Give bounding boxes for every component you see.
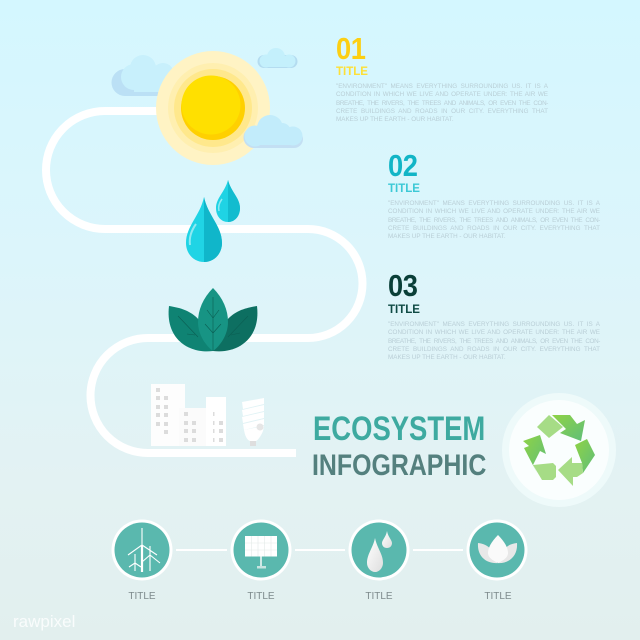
body text 03: "ENVIRONMENT" MEANS EVERYTHING SURROUNDING US. IT IS A: [388, 321, 600, 328]
number 01: 01: [336, 31, 365, 66]
block 02: [388, 148, 600, 240]
heading: infographic: INFOGRAPHIC: [312, 449, 486, 482]
label: title 2: TITLE: [247, 591, 275, 602]
block 03: [388, 268, 600, 361]
body text 02: BREATHE, THE RIVERS, THE TREES AND ANIMALS, OR EVEN THE CON-: [388, 217, 600, 224]
body text 01: BREATHE, THE RIVERS, THE TREES AND ANIMALS, OR EVEN THE CON-: [336, 100, 548, 107]
watermark: rawpixel: [13, 612, 75, 631]
label: title 3: TITLE: [365, 591, 393, 602]
body text 01: CONDITION IN WHICH WE LIVE AND OPERATE UNDER: THE AIR WE: [336, 91, 548, 98]
title 03: TITLE: [388, 302, 420, 316]
block 01: [336, 31, 548, 123]
number 03: 03: [388, 268, 417, 303]
icon: large water drop: [186, 197, 222, 262]
icon: solar panel badge: [230, 520, 292, 580]
icon: small water drop: [216, 180, 240, 222]
body text 02: MAKES UP THE EARTH - OUR HABITAT.: [388, 233, 506, 240]
icon: recycle badge: [502, 393, 616, 507]
body text 03: MAKES UP THE EARTH - OUR HABITAT.: [388, 354, 506, 361]
body text 03: CRETE BUILDINGS AND ROADS IN OUR CITY. EVERYTHING THAT: [388, 346, 600, 353]
title 02: TITLE: [388, 181, 420, 195]
body text 01: CRETE BUILDINGS AND ROADS IN OUR CITY. EVERYTHING THAT: [336, 108, 548, 115]
body text 03: CONDITION IN WHICH WE LIVE AND OPERATE UNDER: THE AIR WE: [388, 329, 600, 336]
icon: wind turbines badge: [112, 520, 172, 580]
icon: cloud right: [244, 115, 303, 148]
icon: leaves: [169, 288, 257, 351]
icon: sun: [156, 51, 270, 165]
title 01: TITLE: [336, 64, 368, 78]
body text 02: CONDITION IN WHICH WE LIVE AND OPERATE UNDER: THE AIR WE: [388, 208, 600, 215]
body text 01: "ENVIRONMENT" MEANS EVERYTHING SURROUNDING US. IT IS A: [336, 83, 548, 90]
label: title 1: TITLE: [128, 591, 156, 602]
body text 02: [388, 200, 600, 240]
icon: cloud top right: [258, 48, 298, 68]
icon: cloud left: [112, 55, 174, 96]
body text 01: [336, 83, 548, 123]
icon: city buildings: [151, 384, 226, 446]
body text 03: BREATHE, THE RIVERS, THE TREES AND ANIMALS, OR EVEN THE CON-: [388, 338, 600, 345]
body text 02: CRETE BUILDINGS AND ROADS IN OUR CITY. EVERYTHING THAT: [388, 225, 600, 232]
body text 03: [388, 321, 600, 361]
winding road: [46, 111, 362, 453]
label: title 4: TITLE: [484, 591, 512, 602]
body text 02: "ENVIRONMENT" MEANS EVERYTHING SURROUNDING US. IT IS A: [388, 200, 600, 207]
number 02: 02: [388, 148, 417, 183]
icon: leaves badge: [466, 520, 528, 580]
heading: ecosystem: ECOSYSTEM: [313, 410, 485, 448]
body text 01: MAKES UP THE EARTH - OUR HABITAT.: [336, 116, 454, 123]
connector lines: [176, 549, 463, 551]
icon: light bulb: [242, 398, 264, 446]
icon: water drops badge: [348, 520, 410, 580]
